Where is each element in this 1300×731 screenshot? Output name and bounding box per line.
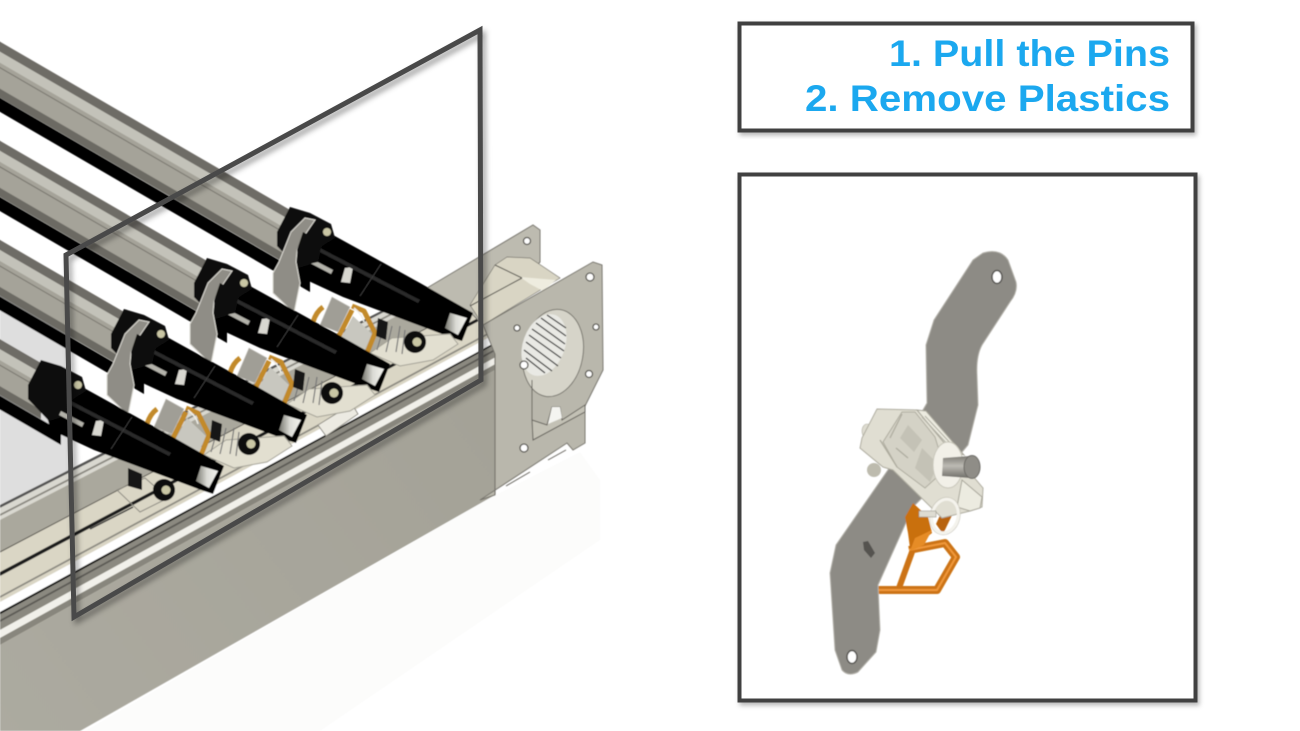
steel pin with washer	[933, 442, 980, 488]
small nut and clamp under the front unit	[128, 468, 175, 501]
floor shadow	[85, 452, 600, 731]
end plates and cylinder housing	[427, 225, 603, 500]
section plane frame	[66, 30, 481, 617]
connector line	[481, 378, 741, 382]
beam side face	[0, 370, 495, 731]
gray plate	[830, 252, 1016, 674]
detail panel	[740, 174, 1196, 700]
retaining ring with small pin	[919, 494, 964, 538]
beam top rail bands	[0, 253, 495, 645]
handle assemblies	[0, 0, 473, 494]
orange handle behind plate	[878, 543, 956, 590]
detail: exploded plate with pin and plastics	[830, 252, 1016, 674]
gray backdrop outside the frame	[0, 290, 70, 505]
scene: isometric CAD view of rail assembly	[0, 0, 603, 731]
step 2 heading: 2. Remove Plastics	[805, 78, 1170, 119]
orange clip	[905, 500, 957, 551]
step 1 heading: 1. Pull the Pins	[889, 33, 1170, 74]
plastic block	[860, 409, 983, 518]
text callout	[740, 24, 1192, 130]
